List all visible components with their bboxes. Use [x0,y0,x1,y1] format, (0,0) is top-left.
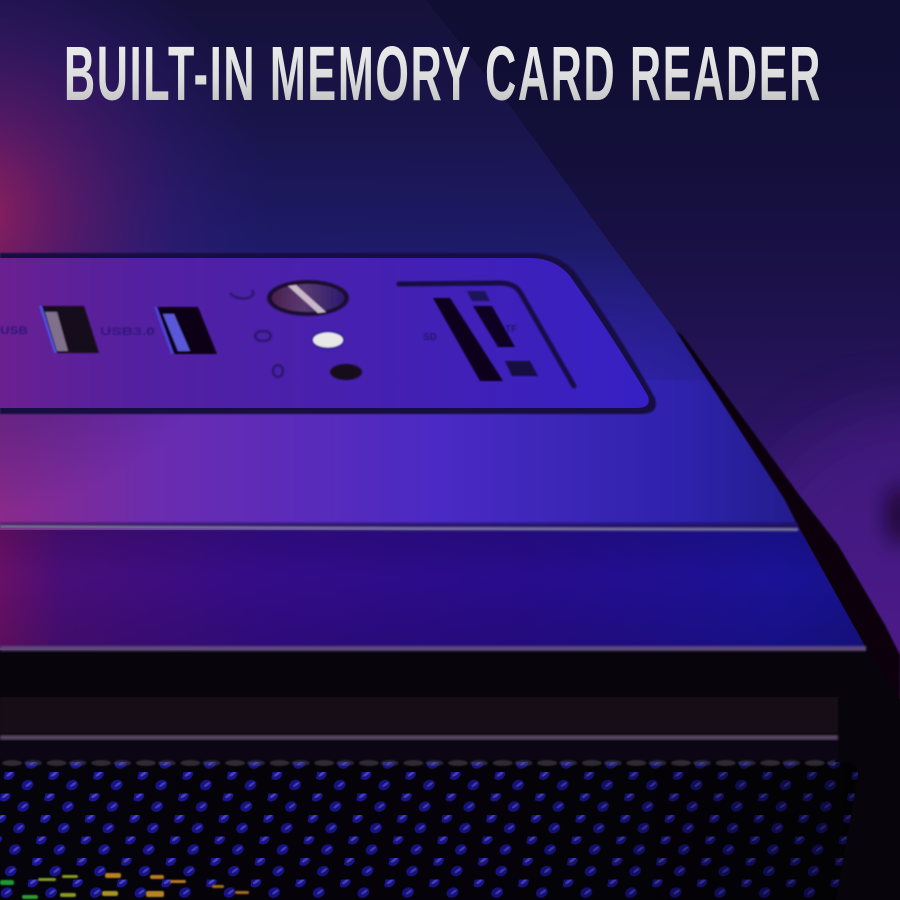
memory card reader recess [399,283,574,386]
memory card reader recess: SD [423,332,437,343]
status LED [255,330,345,350]
case top surface [0,0,900,650]
USB port left [0,306,99,353]
USB port right [100,307,217,354]
ledge highlight line [0,523,798,531]
front mesh grille [0,757,858,900]
port panel [0,253,656,414]
audio jack [273,364,362,380]
dark case band [0,646,900,900]
case side shadow edge [676,331,900,720]
RGB fan glow [0,873,249,899]
USB port right: USB3.0 [100,326,155,338]
memory card reader recess: TF [505,324,517,335]
USB port left: USB [0,325,28,337]
power button [230,280,349,316]
front face of the case [0,530,866,648]
